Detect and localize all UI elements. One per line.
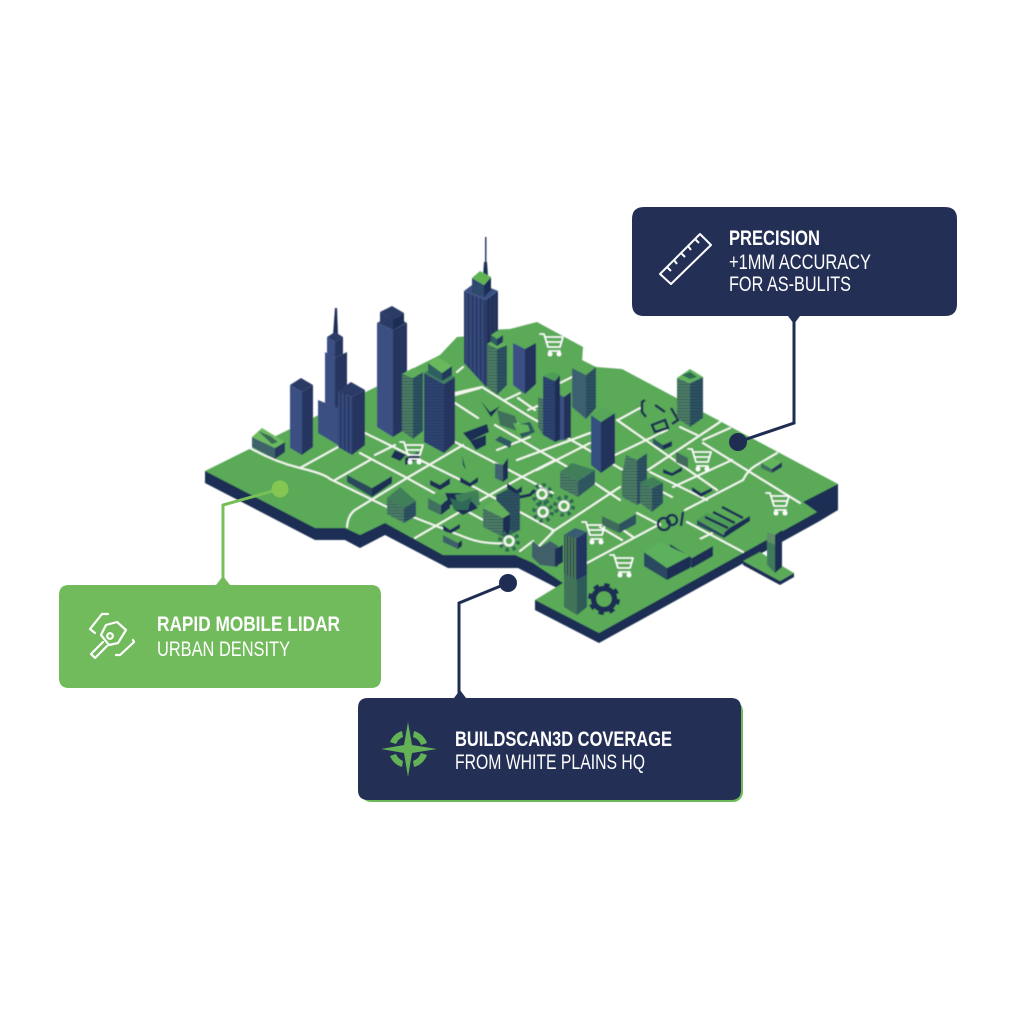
block: low brick — [602, 508, 636, 533]
icon: lidar scanner — [90, 614, 134, 658]
tower: south striped — [564, 528, 587, 615]
icon: carts — [400, 442, 789, 577]
callout: precision — [632, 207, 957, 324]
icon: dark brackets and blobs north-east — [642, 400, 678, 432]
main skyscraper with antenna — [464, 237, 498, 387]
tower: blue-gray striped — [572, 360, 596, 419]
icon: dark gear — [590, 586, 618, 612]
low blocks: west — [347, 450, 420, 497]
extension plate edge — [743, 561, 794, 585]
icon: curly blob — [658, 512, 683, 530]
tower: navy block — [290, 378, 313, 455]
tower: striped navy block — [338, 382, 365, 455]
text: urban density: URBAN DENSITY — [157, 638, 290, 661]
tower: twin green-navy — [538, 372, 571, 442]
fragments: center — [430, 456, 480, 549]
map base side — [205, 471, 838, 643]
block: central building — [483, 488, 520, 537]
icon: ruler — [660, 234, 711, 284]
tower cluster: east center — [622, 448, 663, 512]
text: from white plains hq: FROM WHITE PLAINS HQ — [455, 751, 645, 774]
low building: left edge — [252, 428, 285, 459]
icon: compass star — [381, 722, 437, 777]
road network — [250, 367, 800, 563]
block: center west — [428, 492, 450, 515]
connector: precision — [729, 316, 794, 451]
connector: green lidar — [223, 480, 288, 580]
text: accuracy: +1MM ACCURACY — [729, 251, 871, 274]
connector: coverage — [459, 574, 517, 695]
tower: east skyscraper — [677, 369, 703, 427]
isometric city map — [205, 237, 838, 643]
gears: center — [500, 485, 573, 550]
block: south-center — [532, 541, 563, 567]
map top surface — [205, 322, 838, 633]
tower: extension — [767, 530, 782, 573]
tower: tall navy — [377, 306, 407, 437]
icon: cart top — [540, 334, 563, 356]
tower: navy slab — [513, 343, 536, 394]
low blocks: east row — [653, 434, 782, 497]
block: small navy — [495, 458, 522, 494]
heading: rapid mobile lidar: RAPID MOBILE LIDAR — [157, 613, 340, 636]
tower: navy east — [591, 407, 615, 473]
panel shadow — [361, 701, 743, 802]
block: west green-gray — [387, 487, 416, 523]
tower: spire skyscraper — [318, 308, 347, 445]
text: as-bulits: FOR AS-BULITS — [729, 273, 851, 296]
low fragments: central north — [463, 401, 535, 450]
block: cluster east of gears — [560, 463, 595, 497]
tower: green striped — [402, 368, 423, 439]
callout: rapid mobile lidar — [59, 576, 381, 688]
tower: dark striped with green cap — [424, 357, 455, 453]
tower: green with cap — [487, 331, 507, 395]
heading: precision: PRECISION — [729, 227, 820, 250]
low boxes: south-east — [644, 533, 713, 580]
heading: buildscan3d coverage: BUILDSCAN3D COVERAGE — [455, 728, 672, 751]
extension plate — [743, 552, 794, 581]
stairs block — [697, 507, 750, 538]
callout: buildscan3d coverage — [358, 690, 743, 802]
